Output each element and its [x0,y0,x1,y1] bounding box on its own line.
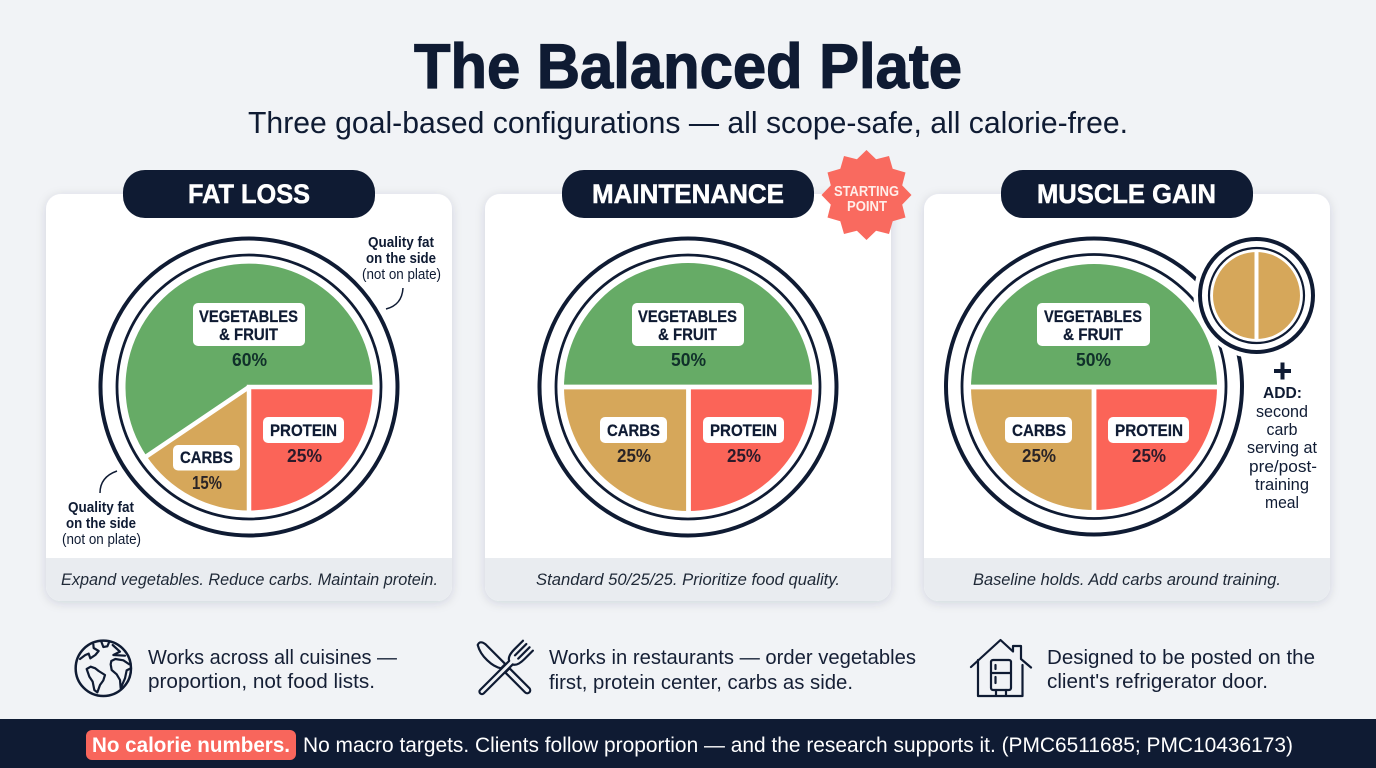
label: protein 25% [263,417,344,466]
text: refrigerator: Designed to be posted on the [1047,646,1315,669]
plate: fat loss [100,238,398,536]
callout: add second carb serving: carb [1266,421,1298,439]
label: protein 25% [703,417,784,466]
label: carbs 15%: 15% [192,473,222,493]
side plate: second carb serving [1194,232,1320,358]
note: restaurants [474,640,916,698]
label: carbs 15%: CARBS [180,448,233,467]
label: vegetables 50%: VEGETABLES [1044,307,1142,326]
heading: fat loss [123,170,375,218]
heading: muscle gain: MUSCLE GAIN [1037,179,1216,209]
caption: fat loss [46,558,452,601]
label: protein 25%: 25% [727,446,761,466]
label: vegetables 50%: 50% [1076,350,1111,370]
callout: quality fat top [362,235,441,309]
icon: fork and knife [474,640,533,698]
card background [46,194,452,601]
note: refrigerator [971,640,1315,696]
subtitle: Three goal-based configurations — all scope-safe, all calorie-free. [248,105,1128,140]
text: footer statement: No macro targets. Clients follow proportion — and the research supports it. (PMC6511685; PMC10436173) [303,733,1293,757]
panel: muscle gain [924,170,1330,601]
callout: quality fat bottom: Quality fat [68,500,134,516]
plate: muscle gain [946,238,1242,534]
card background [485,194,891,601]
label: protein 25%: PROTEIN [710,421,777,440]
text: restaurants [549,646,916,694]
label: vegetables 60%: VEGETABLES [199,307,298,326]
heading: muscle gain [1001,170,1253,218]
label: vegetables 60% [193,303,305,370]
caption: muscle gain [924,558,1330,601]
label: protein 25%: 25% [287,446,322,466]
badge: starting point: STARTING [834,184,899,200]
callout: add second carb serving: training [1255,476,1309,494]
text: refrigerator: client's refrigerator door. [1047,670,1268,693]
heading: maintenance [562,170,814,218]
highlight: no calorie numbers: No calorie numbers. [92,733,290,757]
label: carbs 25% [1005,417,1072,466]
label: protein 25%: PROTEIN [270,421,337,440]
callout: quality fat top: (not on plate) [362,267,441,283]
callout: quality fat bottom: (not on plate) [62,532,141,548]
text: cuisines: Works across all cuisines — [148,646,397,669]
caption: maintenance: Standard 50/25/25. Prioritize food quality. [536,570,840,589]
label: vegetables 60%: & FRUIT [219,325,279,344]
note: cuisines [76,641,397,696]
label: vegetables 50% [632,303,744,370]
callout: add second carb serving: serving at [1247,439,1317,457]
panel: fat loss [46,170,452,601]
badge: starting point [822,150,912,240]
label: carbs 25%: CARBS [1012,421,1066,440]
icon: house with refrigerator [971,640,1031,696]
caption: fat loss: Expand vegetables. Reduce carbs. Maintain protein. [61,570,438,589]
plate: maintenance [540,238,836,536]
label: vegetables 50% [1037,303,1150,370]
label: carbs 25%: CARBS [607,421,660,440]
label: carbs 25%: 25% [617,446,651,466]
label: vegetables 50%: 50% [671,350,706,370]
callout: add second carb serving [1247,362,1317,512]
label: protein 25%: 25% [1132,446,1166,466]
panel: maintenance [485,150,912,601]
callout: add second carb serving: ADD: [1263,385,1302,402]
label: protein 25%: PROTEIN [1115,421,1183,440]
card background [924,194,1330,601]
label: vegetables 50%: VEGETABLES [638,307,737,326]
callout: add second carb serving: pre/post- [1249,458,1317,476]
label: vegetables 60%: 60% [232,350,267,370]
text: restaurants: Works in restaurants — order vegetables [549,646,916,669]
heading: maintenance: MAINTENANCE [592,179,784,209]
label: protein 25% [1108,417,1189,466]
label: vegetables 50%: & FRUIT [658,325,718,344]
callout: add second carb serving: meal [1265,494,1299,512]
heading: fat loss: FAT LOSS [188,179,310,209]
label: vegetables 50%: & FRUIT [1063,325,1124,344]
label: carbs 25% [600,417,667,466]
text: cuisines [148,646,397,693]
caption: muscle gain: Baseline holds. Add carbs around training. [973,570,1281,589]
callout: add second carb serving: second [1256,403,1308,421]
text: cuisines: proportion, not food lists. [148,670,375,693]
title: The Balanced Plate [414,32,962,102]
text: refrigerator [1047,646,1315,693]
label: carbs 15% [173,445,240,493]
label: carbs 25%: 25% [1022,446,1056,466]
text: restaurants: first, protein center, carbs as side. [549,671,853,694]
callout: quality fat bottom [62,471,141,548]
callout: quality fat bottom: on the side [66,516,136,532]
icon: globe [76,641,131,696]
icon: plus [1274,362,1291,380]
callout: quality fat top: on the side [366,251,436,267]
callout: quality fat top: Quality fat [368,235,434,251]
badge: starting point: POINT [847,199,887,215]
footer banner [0,719,1376,768]
caption: maintenance [485,558,891,601]
